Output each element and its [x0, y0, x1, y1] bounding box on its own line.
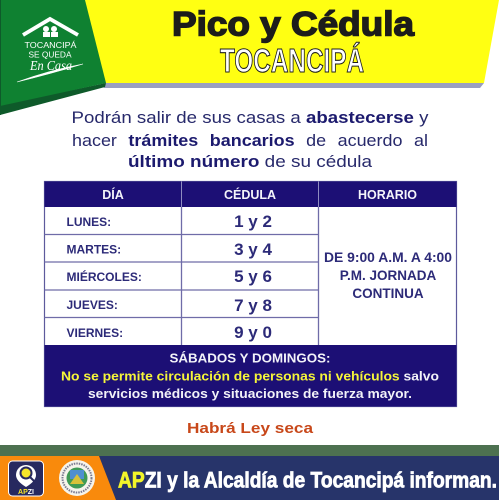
green logo panel — [0, 0, 106, 115]
intro text: último número de su cédula — [128, 153, 373, 171]
table header: CÉDULA — [224, 187, 276, 202]
footer bar — [0, 456, 499, 500]
cedula numbers: 7 y 8 — [234, 296, 272, 315]
icon: APZI app — [8, 461, 44, 496]
weekend notice: SÁBADOS Y DOMINGOS: — [170, 350, 330, 366]
table header: HORARIO — [358, 188, 417, 202]
weekend notice: No se permite circulación de personas ni vehículos salvo — [61, 370, 439, 384]
day labels: LUNES: — [66, 215, 111, 229]
table header — [44, 182, 456, 207]
dry law notice: Habrá Ley seca — [187, 420, 314, 437]
cedula numbers: 9 y 0 — [234, 323, 272, 342]
logo text: TOCANCIPÁ — [24, 40, 77, 50]
day labels: MARTES: — [66, 242, 121, 256]
table header: DÍA — [102, 187, 124, 202]
weekend notice — [44, 345, 456, 406]
cedula numbers — [234, 212, 272, 342]
intro text: Podrán salir de sus casas a abastecerse y — [72, 109, 429, 127]
day labels: VIERNES: — [66, 326, 123, 340]
weekend notice: servicios médicos y situaciones de fuerza mayor. — [88, 387, 412, 401]
icon: house roof logo — [23, 19, 78, 37]
cedula numbers: 1 y 2 — [234, 212, 272, 231]
cedula numbers: 5 y 6 — [234, 267, 272, 286]
schedule hours: DE 9:00 A.M. A 4:00 — [324, 250, 452, 265]
schedule hours: CONTINUA — [352, 286, 424, 301]
green strip — [0, 445, 499, 456]
intro text: hacer trámites bancarios de acuerdo al — [72, 132, 428, 150]
day labels: JUEVES: — [66, 298, 118, 312]
cedula numbers: 3 y 4 — [234, 240, 272, 259]
day labels — [66, 215, 142, 340]
title: Pico y Cédula — [172, 6, 415, 44]
subtitle: TOCANCIPÁ — [220, 42, 364, 79]
logo text — [17, 40, 83, 82]
icon: municipal seal — [59, 460, 95, 496]
schedule hours — [324, 250, 452, 301]
icon: APZI app: APZI — [18, 489, 34, 496]
yellow title banner — [85, 0, 499, 88]
logo text: En Casa — [29, 59, 72, 74]
logo text: SE QUEDA — [28, 50, 72, 60]
day labels: MIÉRCOLES: — [66, 269, 142, 284]
intro text — [72, 109, 429, 171]
schedule hours: P.M. JORNADA — [340, 268, 437, 283]
schedule table — [44, 182, 456, 406]
